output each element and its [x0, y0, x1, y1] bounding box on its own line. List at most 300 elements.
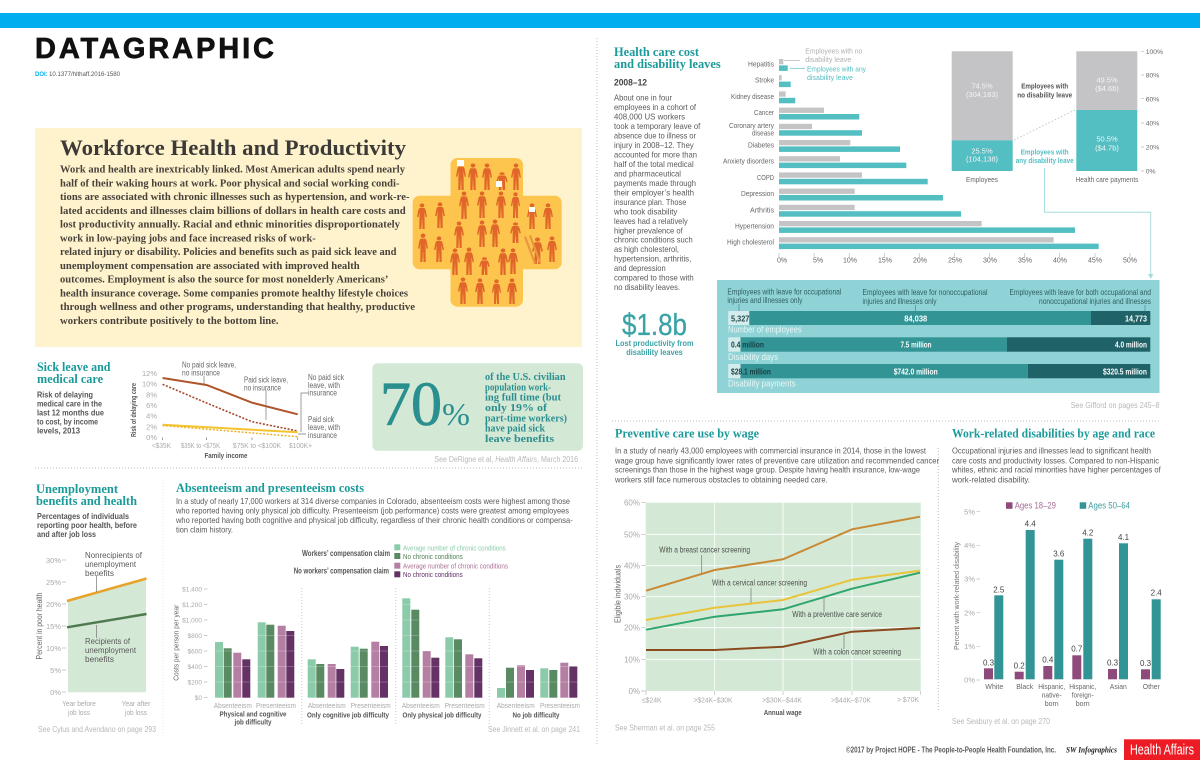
heading: health care cost: and disability leaves	[614, 56, 721, 71]
bar chart: chronic conditions prevalence: High cholesterol	[727, 238, 774, 247]
line chart: preventive care by wage: With a cervical cancer screening	[712, 578, 807, 587]
description	[951, 446, 1161, 484]
panel: leave types breakdown	[717, 280, 1160, 393]
description: higher prevalence of	[614, 225, 683, 235]
line chart: preventive care by wage	[614, 499, 921, 717]
stacked bars: employees and payments: Employees with	[1021, 82, 1069, 91]
intro body text: half of their waking hours at work. Poor physical and social working condi-	[60, 177, 400, 189]
section: sick leave and medical care	[37, 359, 345, 460]
line chart: risk of delaying care: Paid sick	[308, 415, 335, 424]
bar: disability days: 7.5 million	[900, 340, 932, 350]
description: who reported having only physical job difficulty. Presenteeism (job performance) costs were greatest among employees	[175, 506, 569, 516]
heading: absenteeism: Absenteeism and presenteeism costs	[176, 480, 364, 495]
description: compared to those with	[614, 273, 694, 283]
bar chart: disability by age and race: 0.3	[1107, 658, 1119, 668]
area chart: poor health before and after job loss: 15%	[46, 622, 61, 631]
bar chart: disability by age and race: born	[1076, 699, 1090, 708]
bar chart: chronic conditions prevalence: Hypertension	[735, 222, 774, 230]
stacked bars: employees and payments: 50.5%	[1096, 135, 1118, 144]
top banner	[0, 13, 1200, 28]
bar chart: disability by age and race: 2.5	[993, 586, 1005, 594]
bar chart: disability by age and race: 4.1	[1118, 533, 1130, 542]
callout: 70 percent: ing full time (but	[485, 393, 562, 404]
area chart: poor health before and after job loss: Year after	[122, 699, 151, 708]
area chart: poor health before and after job loss: benefits	[85, 654, 114, 664]
bar chart: disability by age and race: 0.4	[1042, 656, 1054, 664]
line chart: risk of delaying care: Paid sick leave,	[244, 376, 288, 384]
intro body text	[60, 164, 415, 327]
bars: only cognitive job difficulty	[308, 642, 388, 698]
subheading: poor health percentages: Percentages of individuals	[37, 511, 129, 521]
line chart: preventive care by wage: > $70K	[897, 695, 919, 704]
stat: 1.8b lost productivity: Lost productivity from	[616, 338, 694, 348]
description: care costs and productivity losses. Compared to non-Hispanic	[952, 455, 1160, 465]
heading: unemployment	[36, 481, 138, 508]
section: work-related disabilities	[951, 426, 1162, 726]
description: and depression	[614, 263, 666, 273]
bar chart: chronic conditions prevalence: Anxiety disorders	[723, 157, 774, 166]
bar chart: chronic conditions prevalence: 15%	[878, 258, 892, 264]
section: health care cost and disability leaves	[613, 44, 1163, 410]
subheading: risk of delaying: levels, 2013	[37, 426, 80, 436]
bar chart: costs per person: Presenteeism	[540, 701, 580, 710]
line chart: risk of delaying care: 6%	[146, 401, 157, 410]
heading: sick leave: medical care	[37, 371, 103, 386]
description: their employer’s health	[614, 187, 694, 197]
intro body text: through wellness and other programs, understanding that healthy, productive	[60, 301, 415, 313]
area chart: poor health before and after job loss: 20%	[46, 600, 61, 609]
bar chart: disability by age and race: 0.2	[1014, 662, 1025, 670]
bar chart: chronic conditions prevalence: Diabetes	[748, 140, 774, 150]
bars: physical and cognitive job difficulty	[215, 622, 294, 698]
stacked bars: employees and payments: 74.5%	[971, 81, 993, 90]
bar chart: chronic conditions prevalence: Arthritis	[750, 205, 774, 214]
bar: number of employees: Number of employees	[728, 324, 802, 336]
intro body text: related injury or disability. Policies and benefits such as paid sick leave and	[60, 246, 396, 258]
bar: disability payments: $28.1 million	[731, 366, 771, 376]
stat: 1.8b lost productivity	[616, 307, 694, 357]
bar chart: costs per person: Absenteeism	[497, 701, 535, 710]
bar chart: disability by age and race: Hispanic,	[1069, 682, 1096, 691]
line chart: risk of delaying care: leave, with	[308, 423, 340, 432]
bars: no job difficulty	[497, 663, 577, 698]
intro body text: tions are associated with chronic illnesses such as hypertension, and work-re-	[60, 191, 410, 203]
bar chart: chronic conditions prevalence: Hepatitis	[748, 60, 774, 68]
bar: disability payments: $320.5 million	[1103, 366, 1147, 376]
description: tion claim history.	[176, 524, 233, 534]
bar chart: disability by age and race: 4.4	[1025, 520, 1036, 528]
stacked bars: employees and payments: ($4.7b)	[1095, 143, 1119, 152]
bar chart: chronic conditions prevalence: 25%	[948, 258, 962, 264]
description: who took disability	[613, 206, 678, 216]
line chart: risk of delaying care: $100K+	[289, 441, 313, 450]
line chart: risk of delaying care: insurance	[308, 388, 337, 398]
description: who reported having both cognitive and physical job difficulty, regardless of their chronic health conditions or compensa-	[175, 515, 573, 525]
heading: sick leave: Sick leave and	[37, 359, 111, 374]
line chart: preventive care by wage: ≤$24K	[642, 696, 662, 705]
legend: No workers’ compensation claim	[294, 566, 389, 576]
legend: age groups: Ages 18–29	[1015, 500, 1056, 510]
bar chart: disability by age and race: 0.3	[1140, 659, 1152, 668]
line chart: preventive care by wage: 0%	[628, 687, 640, 696]
bar chart: costs per person: $1,000	[182, 618, 202, 624]
callout: 70 percent: have paid sick	[485, 424, 545, 435]
stacked bars: employees and payments: Employees with	[1021, 147, 1069, 156]
icon: medical cross of workers	[413, 158, 562, 307]
area chart: poor health before and after job loss: 30%	[46, 556, 61, 565]
intro body text: outcomes. Employment is also the source for most nonelderly Americans’	[60, 274, 388, 286]
line chart: preventive care by wage: 60%	[624, 499, 640, 508]
bar chart: chronic conditions prevalence: Coronary artery	[729, 121, 774, 130]
bar chart: chronic conditions prevalence: 5%	[813, 258, 823, 264]
bar chart: disability by age and race: Other	[1143, 682, 1160, 691]
intro body text: Work and health are inextricably linked. Most American adults spend nearly	[60, 164, 405, 176]
stacked bars: employees and payments: 25.5%	[971, 146, 993, 155]
heading: preventive care: Preventive care use by wage	[615, 426, 759, 441]
legend: disability leave groups: disability leave	[805, 55, 851, 64]
line chart: preventive care by wage: 30%	[624, 593, 640, 602]
area chart: poor health before and after job loss: Percent in poor health	[35, 592, 44, 660]
section: preventive care use by wage	[614, 426, 939, 733]
bar chart: disability by age and race: 4%	[964, 541, 975, 550]
stat: 1.8b lost productivity: $1.8b	[622, 307, 687, 342]
bar chart: costs per person: Presenteeism	[445, 701, 485, 710]
stacked bars: employees and payments: 40%	[1146, 121, 1159, 128]
intro title: Workforce Health and Productivity	[60, 135, 406, 160]
legend: Average number of chronic conditions	[403, 544, 506, 552]
area chart: poor health before and after job loss: unemployment	[85, 645, 137, 655]
DOI line: DOI:	[35, 72, 48, 78]
bar chart: chronic conditions prevalence: Kidney disease	[731, 92, 774, 101]
stacked bars: employees and payments: 60%	[1146, 96, 1159, 104]
line chart: preventive care by wage: 10%	[624, 655, 640, 664]
bar chart: disability by age and race: Hispanic,	[1038, 682, 1065, 691]
description: chronic conditions such	[614, 235, 693, 245]
bar chart: disability by age and race: 3.6	[1053, 550, 1065, 558]
bar: number of employees: 14,773	[1125, 313, 1147, 323]
bar chart: disability by age and race: White	[985, 682, 1003, 691]
description: hypertension, arthritis,	[614, 254, 691, 264]
stat: 1.8b lost productivity: disability leaves	[626, 347, 683, 357]
stacked bars: employees and payments: 80%	[1146, 73, 1159, 80]
area chart: poor health before and after job loss: Year before	[62, 699, 96, 708]
footer: copyright: ©2017 by Project HOPE - The People-to-People Health Foundation, Inc.	[846, 746, 1056, 755]
bar chart: disability by age and race: 0.7	[1071, 644, 1083, 654]
masthead: DATAGRAPHIC: DATAGRAPHIC	[35, 33, 274, 65]
stacked bars: employees and payments: (304,183)	[966, 90, 999, 99]
column labels: nonoccupational injuries and illnesses	[1039, 297, 1151, 306]
line chart: preventive care by wage: Annual wage	[764, 708, 802, 717]
intro body text: lost productivity annually. Racial and ethnic minorities disproportionately	[60, 219, 400, 231]
line chart: preventive care by wage: >$30K–$44K	[762, 696, 802, 705]
subheading: risk of delaying: Risk of delaying	[37, 390, 93, 400]
description: no disability leaves.	[614, 282, 680, 292]
line chart: risk of delaying care: 8%	[146, 390, 157, 399]
bar: number of employees: 5,327	[731, 313, 750, 323]
bar chart: costs per person: Absenteeism	[308, 701, 346, 710]
stacked bars: employees and payments: ($4.6b)	[1095, 84, 1119, 93]
intro body text: workers contribute positively to the bottom line.	[60, 315, 279, 327]
stacked bars: employees and payments	[952, 49, 1163, 184]
bar chart: chronic conditions prevalence: Depression	[741, 189, 774, 198]
bar chart: disability by age and race: 0%	[964, 676, 975, 685]
bar chart: chronic conditions prevalence: Cancer	[754, 108, 774, 117]
callout: 70 percent: only 19% of	[485, 403, 548, 414]
callout: 70 percent: population work-	[485, 382, 552, 393]
bar chart: chronic conditions prevalence	[723, 46, 1137, 264]
callout: 70 percent	[372, 363, 583, 451]
heading: health care cost: Health care cost	[614, 44, 700, 59]
area chart: poor health before and after job loss: job loss	[124, 708, 147, 717]
heading: unemployment: Unemployment	[36, 481, 119, 496]
source: Sherman: See Sherman et al. on page 255	[615, 724, 715, 733]
bar: disability payments: Disability payments	[728, 378, 796, 390]
column labels	[727, 288, 1151, 306]
bar chart: costs per person: Presenteeism	[256, 701, 296, 710]
line chart: risk of delaying care	[129, 360, 345, 460]
intro body text: work in low-paying jobs and face increased risks of work-	[60, 232, 316, 244]
DOI line: 10.1377/hlthaff.2016-1580	[49, 72, 121, 78]
description	[614, 446, 939, 484]
bar chart: chronic conditions prevalence: 0%	[777, 258, 787, 264]
subheading: poor health percentages: and after job loss	[37, 529, 96, 539]
bar chart: disability by age and race	[952, 508, 1162, 708]
stacked bars: employees and payments: no disability leave	[1017, 90, 1072, 99]
legend: Workers’ compensation claim	[302, 549, 390, 558]
column labels: Employees with leave for both occupational and	[1010, 288, 1151, 297]
bar: number of employees: 84,038	[904, 313, 927, 323]
bar chart: costs per person: Presenteeism	[351, 701, 391, 710]
line chart: risk of delaying care: 2%	[146, 422, 157, 431]
bar: number of employees	[728, 311, 1150, 336]
bar: disability days: Disability days	[728, 352, 778, 363]
bar chart: disability by age and race: 2.4	[1151, 588, 1162, 598]
line chart: risk of delaying care: No paid sick	[308, 373, 345, 382]
line chart: risk of delaying care: no insurance	[182, 368, 220, 378]
bar chart: costs per person: $0	[195, 695, 202, 702]
column labels: injuries and illnesses only	[862, 297, 936, 306]
heading: sick leave	[37, 359, 111, 386]
bar chart: disability by age and race: Asian	[1110, 682, 1127, 691]
description: 408,000 US workers	[614, 112, 685, 122]
callout: 70 percent: leave benefits	[485, 434, 554, 445]
description: leaves had a relatively	[614, 216, 688, 226]
bar chart: costs per person: $1,400	[182, 586, 202, 594]
stacked bars: employees and payments: 49.5%	[1096, 75, 1118, 84]
heading: health care cost	[614, 44, 721, 71]
intro body text: lated accidents and illnesses claim billions of dollars in health care costs and	[60, 205, 406, 217]
bar chart: chronic conditions prevalence: 50%	[1123, 258, 1137, 264]
area chart: poor health before and after job loss: Nonrecipients of	[85, 550, 143, 560]
description: employees in a cohort of	[614, 102, 697, 112]
bar: disability payments	[728, 364, 1150, 390]
callout: 70 percent: %	[442, 396, 470, 432]
legend: disability leave groups: disability leave	[807, 73, 853, 82]
line chart: preventive care by wage: 50%	[624, 530, 640, 539]
line chart: risk of delaying care: leave, with	[308, 381, 340, 390]
bar chart: disability by age and race: 1%	[964, 642, 975, 651]
bar chart: disability by age and race: foreign-	[1072, 690, 1094, 700]
bar chart: costs per person: Absenteeism	[214, 701, 252, 710]
line chart: risk of delaying care: $75K to <$100K	[233, 441, 281, 450]
panel: introduction	[35, 128, 582, 347]
bar chart: costs per person	[172, 586, 580, 726]
description: In a study of nearly 43,000 employees with commercial insurance in 2014, those in the lowest	[615, 446, 927, 456]
stacked bars: employees and payments: (104,138)	[966, 155, 999, 164]
description: as high cholesterol,	[614, 244, 679, 254]
bar chart: disability by age and race: native-	[1042, 690, 1062, 700]
legend: Average number of chronic conditions	[403, 562, 508, 570]
bar: disability days: 4.0 million	[1115, 340, 1147, 350]
section: absenteeism and presenteeism costs	[172, 480, 580, 734]
line chart: preventive care by wage: >$44K–$70K	[831, 696, 871, 705]
arrow: to employee breakdown	[1044, 168, 1153, 279]
bar chart: costs per person: Only cognitive job difficulty	[307, 710, 390, 720]
description: payments made through	[614, 178, 696, 188]
legend: age groups	[1006, 500, 1130, 510]
bar chart: costs per person: $600	[188, 648, 202, 656]
source: Seabury: See Seabury et al. on page 270	[952, 717, 1050, 726]
description: About one in four	[614, 93, 672, 103]
description: screenings than those in the highest wage group. Despite having health insurance, low-wage	[615, 465, 920, 475]
line chart: risk of delaying care: 10%	[142, 380, 157, 389]
area chart: poor health before and after job loss: Recipients of	[85, 636, 131, 646]
bar chart: chronic conditions prevalence: 35%	[1018, 258, 1032, 264]
line chart: preventive care by wage: 20%	[624, 624, 640, 633]
bar chart: chronic conditions prevalence: 10%	[843, 258, 857, 264]
bars: only physical job difficulty	[402, 598, 482, 698]
bar chart: costs per person: Only physical job difficulty	[402, 710, 482, 720]
description: work-related disability.	[951, 474, 1030, 484]
subheading: risk of delaying: medical care in the	[37, 398, 102, 408]
legend: No chronic conditions	[403, 570, 463, 579]
bar chart: chronic conditions prevalence: 30%	[983, 258, 997, 264]
area chart: poor health before and after job loss: benefits	[85, 568, 114, 578]
legend: disability leave groups: Employees with any	[807, 64, 866, 74]
column labels: injuries and illnesses only	[727, 296, 802, 305]
bar chart: disability by age and race: 3%	[964, 575, 975, 584]
bar chart: disability by age and race: Black	[1016, 682, 1033, 691]
bar: disability days: 0.4 million	[731, 340, 764, 350]
line chart: preventive care by wage: 40%	[624, 562, 640, 571]
area chart: poor health before and after job loss	[35, 550, 151, 717]
line chart: risk of delaying care: insurance	[308, 431, 337, 440]
area chart: poor health before and after job loss: 25%	[46, 578, 61, 587]
bar chart: costs per person: $1,200	[182, 602, 202, 609]
section: unemployment benefits and health	[35, 481, 156, 734]
line chart: preventive care by wage: Eligible individuals	[614, 565, 622, 623]
bar: disability days	[728, 337, 1150, 363]
line chart: risk of delaying care: Risk of delaying care	[129, 383, 138, 437]
bar chart: chronic conditions prevalence: COPD	[757, 173, 774, 182]
bar chart: costs per person: $800	[188, 633, 202, 640]
bar chart: chronic conditions prevalence: 45%	[1088, 258, 1102, 264]
line chart: risk of delaying care: no insurance	[244, 384, 281, 392]
intro body text: health insurance coverage. Some companies promote healthy lifestyle choices	[60, 287, 409, 299]
line chart: risk of delaying care: 4%	[146, 412, 157, 421]
subheading: poor health percentages	[37, 511, 137, 539]
stacked bars: employees and payments: 100%	[1146, 49, 1163, 56]
bar chart: disability by age and race: Percent with work-related disability	[952, 542, 961, 650]
bar chart: chronic conditions prevalence: disease	[752, 128, 774, 138]
line chart: risk of delaying care: <$35K	[152, 441, 171, 450]
stacked bars: employees and payments: Health care payments	[1076, 175, 1139, 184]
callout: 70 percent: 70	[380, 371, 442, 439]
description: workers still face numerous obstacles to obtaining needed care.	[614, 474, 828, 484]
line chart: risk of delaying care: $35K to <$75K	[181, 441, 220, 450]
description: whites, ethnic and racial minorities have higher percentages of	[951, 465, 1161, 475]
callout: 70 percent: of the U.S. civilian	[485, 372, 566, 383]
description	[613, 93, 701, 292]
subheading: poor health percentages: reporting poor health, before	[37, 520, 137, 530]
source: Jinnett: See Jinnett et al. on page 241	[488, 725, 580, 734]
legend: disability leave groups: Employees with no	[805, 46, 862, 56]
stacked bars: employees and payments: Employees	[966, 175, 998, 184]
area chart: poor health before and after job loss: job loss	[67, 708, 90, 717]
footer: SW Infographics: SW Infographics	[1066, 745, 1118, 755]
callout: 70 percent: part-time workers)	[485, 413, 567, 424]
bar chart: costs per person: $400	[188, 664, 202, 671]
subheading: risk of delaying: to cost, by income	[37, 416, 98, 426]
description: wage group have significantly lower rates of preventive care utilization and recommended cancer	[614, 455, 939, 465]
legend	[294, 544, 508, 579]
bar: disability payments: $742.0 million	[894, 366, 938, 376]
bar chart: disability by age and race: born	[1045, 699, 1059, 708]
bar chart: chronic conditions prevalence: 20%	[913, 258, 927, 264]
column labels: Employees with leave for occupational	[727, 288, 842, 296]
description: Occupational injuries and illnesses lead to significant health	[952, 446, 1151, 456]
bar chart: costs per person: Absenteeism	[402, 701, 440, 710]
bar chart: disability by age and race: 0.3	[983, 658, 995, 668]
bar chart: costs per person: job difficulty	[234, 718, 272, 726]
bar chart: chronic conditions prevalence: 40%	[1053, 258, 1067, 264]
source: Cylus: See Cylus and Avendano on page 293	[38, 725, 156, 734]
description	[175, 496, 573, 534]
bar chart: disability by age and race: 5%	[964, 508, 975, 516]
bar chart: disability by age and race: 2%	[964, 608, 975, 618]
bar chart: costs per person: Physical and cognitive	[220, 710, 286, 718]
area chart: poor health before and after job loss: 5%	[50, 666, 61, 675]
heading: work-related disabilities: Work-related disabilities by age and race	[952, 426, 1155, 441]
bar chart: costs per person: $200	[188, 680, 202, 686]
legend: disability leave groups	[784, 46, 866, 82]
legend: No chronic conditions	[403, 552, 463, 561]
description: In a study of nearly 17,000 workers at 314 diverse companies in Colorado, absenteeism costs were highest among those	[176, 496, 570, 506]
legend: age groups: Ages 50–64	[1088, 500, 1130, 510]
area chart: poor health before and after job loss: 10%	[46, 644, 61, 653]
subheading: 2008-12: 2008–12	[614, 78, 647, 89]
intro body text: unemployment compensation are associated with improved health	[60, 260, 360, 272]
source: DeRigne: See DeRigne et al, Health Affairs, March 2016	[434, 455, 578, 464]
bar chart: costs per person: No job difficulty	[512, 710, 560, 720]
description: injury in 2008–12. They	[614, 140, 694, 150]
column labels: Employees with leave for nonoccupational	[862, 288, 988, 297]
area chart: poor health before and after job loss: 0%	[50, 688, 61, 697]
subheading: risk of delaying	[37, 390, 104, 436]
bar chart: costs per person: Costs per person per year	[172, 604, 180, 681]
line chart: risk of delaying care: 12%	[142, 369, 157, 378]
stacked bars: employees and payments: 20%	[1146, 145, 1159, 152]
line chart: risk of delaying care: No paid sick leave,	[182, 360, 236, 370]
source: Gifford: See Gifford on pages 245–8	[1071, 401, 1160, 410]
line chart: preventive care by wage: With a colon cancer screening	[813, 648, 901, 657]
area chart: poor health before and after job loss: unemployment	[85, 559, 137, 569]
description: insurance plan. Those	[614, 197, 687, 207]
line chart: preventive care by wage: With a preventive care service	[792, 610, 882, 619]
description: took a temporary leave of	[614, 121, 701, 131]
description: accounted for more than	[614, 150, 697, 160]
stacked bars: employees and payments: 0%	[1146, 169, 1156, 176]
